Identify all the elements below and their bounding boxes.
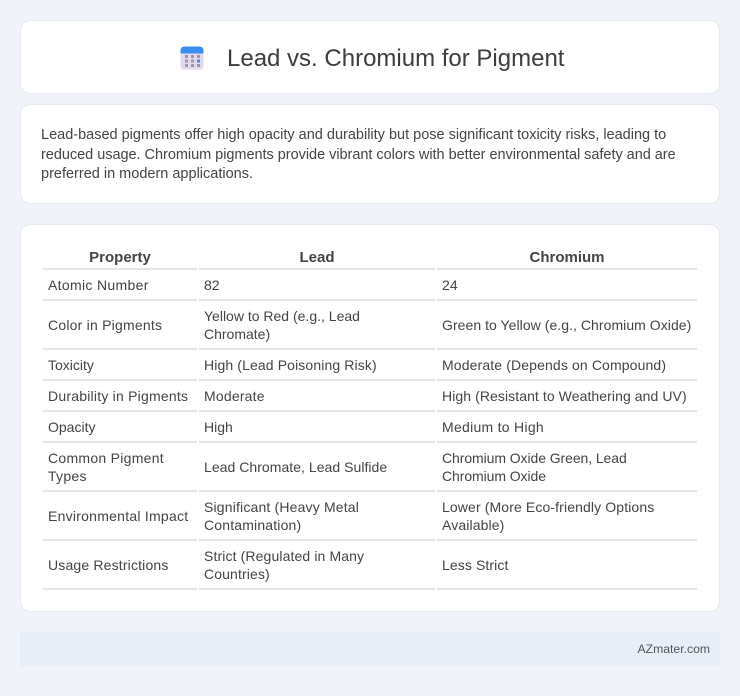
row: Opacity: Opacity xyxy=(48,419,95,435)
row: Color in Pigments: Color in Pigments xyxy=(48,317,162,333)
comparison table: High (Lead Poisoning Risk) xyxy=(204,357,377,373)
comparison table: Strict (Regulated in Many xyxy=(204,548,364,564)
row: Usage Restrictions: Usage Restrictions xyxy=(48,557,169,573)
intro text xyxy=(41,127,676,182)
icon: calendar xyxy=(180,46,204,70)
row: Environmental Impact: Environmental Impact xyxy=(48,508,188,524)
comparison table: Medium to High xyxy=(442,419,544,435)
comparison table: Available) xyxy=(442,517,504,533)
comparison table: Lead Chromate, Lead Sulfide xyxy=(204,459,387,475)
comparison table: Countries) xyxy=(204,566,270,582)
comparison table: Chromium Oxide Green, Lead xyxy=(442,450,627,466)
comparison table: Green to Yellow (e.g., Chromium Oxide) xyxy=(442,317,691,333)
title: Lead vs. Chromium for Pigment xyxy=(227,45,564,72)
comparison table: High (Resistant to Weathering and UV) xyxy=(442,388,687,404)
row: Common Pigment Types xyxy=(48,450,164,484)
title card xyxy=(20,20,720,94)
comparison table: 82 xyxy=(204,277,220,293)
row: Common Pigment Types: Common Pigment xyxy=(48,450,164,466)
header: Property: Property xyxy=(89,249,151,266)
intro text: preferred in modern applications. xyxy=(41,166,253,182)
comparison table: High xyxy=(204,419,233,435)
comparison table: Lower (More Eco-friendly Options xyxy=(442,499,654,515)
row: Toxicity: Toxicity xyxy=(48,357,94,373)
row: Durability in Pigments: Durability in Pigments xyxy=(48,388,188,404)
comparison table: Moderate (Depends on Compound) xyxy=(442,357,666,373)
footer bar xyxy=(20,632,720,666)
row: Common Pigment Types: Types xyxy=(48,468,87,484)
table card xyxy=(20,224,720,612)
comparison table: Yellow to Red (e.g., Lead xyxy=(204,308,360,324)
header: Lead: Lead xyxy=(299,249,334,266)
comparison table: 24 xyxy=(442,277,458,293)
row: Atomic Number: Atomic Number xyxy=(48,277,149,293)
comparison table: Chromium Oxide xyxy=(442,468,546,484)
intro text: reduced usage. Chromium pigments provide vibrant colors with better environmental safety and are xyxy=(41,146,676,162)
intro text: Lead-based pigments offer high opacity and durability but pose significant toxicity risks, leading to xyxy=(41,127,666,143)
comparison table: Significant (Heavy Metal xyxy=(204,499,359,515)
comparison table: Moderate xyxy=(204,388,265,404)
comparison table: Chromate) xyxy=(204,326,270,342)
header: Chromium: Chromium xyxy=(530,249,604,266)
intro card xyxy=(20,104,720,204)
comparison table: Contamination) xyxy=(204,517,301,533)
footer credit: AZmater.com xyxy=(638,642,710,656)
comparison table: Less Strict xyxy=(442,557,508,573)
